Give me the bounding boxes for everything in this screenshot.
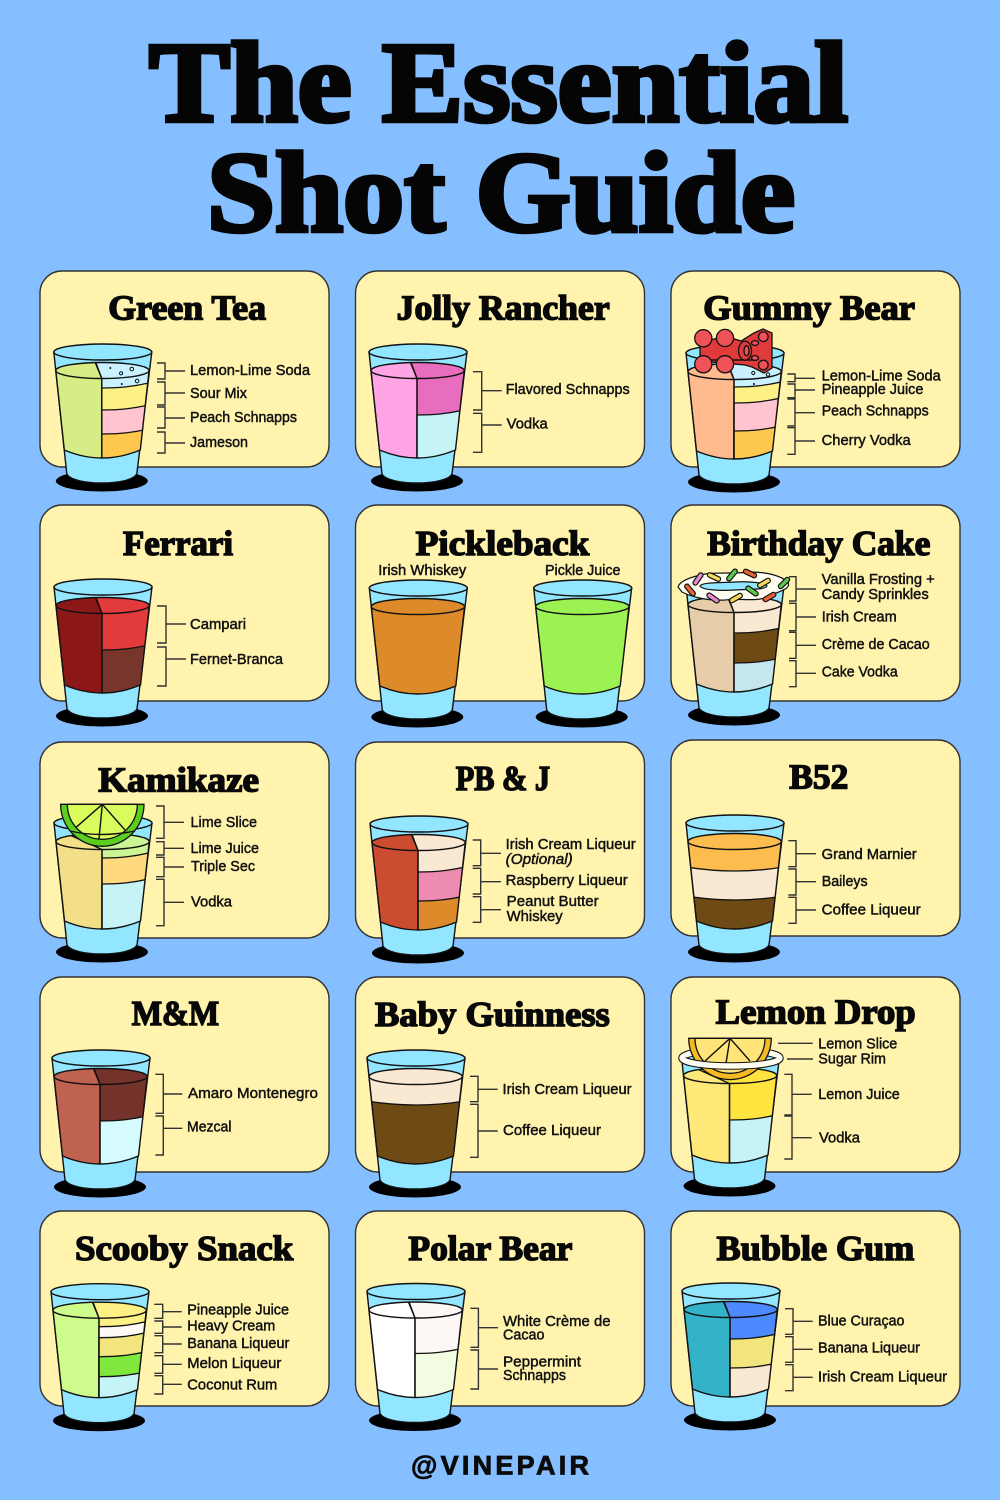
ingredient labels: Vodka bbox=[191, 895, 233, 911]
ingredient labels: Irish Cream Liqueur bbox=[506, 837, 636, 853]
ingredient labels: Whiskey bbox=[507, 909, 563, 925]
glass: Lemon Drop bbox=[681, 1056, 780, 1196]
ingredient labels: Cherry Vodka bbox=[822, 433, 912, 449]
card background bbox=[671, 271, 960, 467]
card background bbox=[356, 977, 644, 1172]
panel: Jolly Rancher bbox=[356, 271, 644, 492]
brackets bbox=[154, 1304, 182, 1394]
brackets bbox=[473, 840, 501, 922]
ingredient labels bbox=[190, 363, 311, 451]
ingredient labels bbox=[818, 1036, 900, 1147]
glass: Birthday Cake bbox=[686, 590, 784, 726]
ingredient labels: Campari bbox=[190, 617, 246, 633]
card background bbox=[356, 271, 644, 467]
heading: Bubble Gum bbox=[717, 1229, 914, 1268]
heading: Polar Bear bbox=[408, 1229, 572, 1268]
ingredient labels: Irish Cream Liqueur bbox=[502, 1082, 632, 1098]
ingredient labels bbox=[187, 1086, 318, 1136]
card background bbox=[40, 977, 329, 1172]
ingredient labels: Mezcal bbox=[187, 1120, 232, 1136]
ingredient labels bbox=[818, 1314, 947, 1386]
glass: Green Tea bbox=[53, 343, 153, 492]
ingredient labels: Lemon-Lime Soda bbox=[822, 369, 942, 385]
card background bbox=[40, 1211, 329, 1406]
ingredient labels: Crème de Cacao bbox=[822, 637, 930, 653]
ingredient labels: Candy Sprinkles bbox=[822, 587, 929, 603]
heading: B52 bbox=[789, 757, 848, 796]
ingredient labels bbox=[187, 1303, 289, 1394]
icon: lemon slice bbox=[689, 1038, 771, 1080]
glass: Pickle Juice bbox=[532, 579, 632, 728]
panel: Kamikaze bbox=[40, 742, 329, 962]
card background bbox=[40, 742, 329, 938]
ingredient labels: Coconut Rum bbox=[187, 1378, 277, 1394]
ingredient labels: Peach Schnapps bbox=[822, 404, 929, 420]
ingredient labels bbox=[506, 382, 630, 432]
brackets bbox=[787, 374, 815, 454]
title: Shot Guide bbox=[207, 129, 795, 256]
ingredient labels: Heavy Cream bbox=[187, 1319, 275, 1335]
ingredient labels bbox=[502, 1082, 632, 1139]
ingredient labels: Lemon Juice bbox=[818, 1087, 900, 1103]
brackets bbox=[156, 806, 184, 926]
panel: B52 bbox=[671, 740, 960, 962]
ingredient labels: Irish Cream Liqueur bbox=[818, 1370, 947, 1386]
ingredient labels: Vodka bbox=[507, 416, 549, 432]
heading: Green Tea bbox=[108, 288, 266, 328]
card background bbox=[40, 505, 329, 701]
brackets bbox=[788, 841, 816, 923]
ingredient labels: Raspberry Liqueur bbox=[506, 873, 628, 889]
title: The Essential bbox=[149, 19, 848, 146]
ingredient labels: Triple Sec bbox=[191, 859, 255, 875]
ingredient labels: Banana Liqueur bbox=[187, 1336, 289, 1352]
ingredient labels: Lime Slice bbox=[190, 815, 257, 831]
ingredient labels bbox=[190, 617, 284, 668]
heading: Jolly Rancher bbox=[397, 288, 610, 328]
glass: Kamikaze bbox=[53, 818, 153, 962]
glass: Baby Guinness bbox=[366, 1049, 466, 1198]
brackets bbox=[778, 1043, 813, 1159]
ingredient labels: Melon Liqueur bbox=[187, 1356, 281, 1372]
ingredient labels: Jameson bbox=[190, 435, 248, 451]
heading: M&M bbox=[132, 994, 219, 1033]
glass: B52 bbox=[685, 814, 785, 962]
card background bbox=[671, 977, 960, 1172]
ingredient labels: Pickle Juice bbox=[545, 563, 620, 579]
ingredient labels bbox=[378, 563, 620, 579]
ingredient labels: Lemon Slice bbox=[818, 1036, 897, 1052]
panel: Green Tea bbox=[40, 271, 329, 492]
card background bbox=[671, 1211, 960, 1406]
panel: M&M bbox=[40, 977, 329, 1198]
brackets bbox=[789, 577, 816, 687]
glass: Irish Whiskey bbox=[368, 579, 468, 728]
ingredient labels: Banana Liqueur bbox=[818, 1341, 920, 1357]
heading: Gummy Bear bbox=[703, 288, 915, 328]
heading: Baby Guinness bbox=[375, 995, 610, 1034]
panel: Birthday Cake bbox=[671, 505, 960, 726]
brackets bbox=[157, 363, 185, 453]
heading: Scooby Snack bbox=[75, 1229, 294, 1268]
card background bbox=[356, 505, 644, 701]
icon: sugar rim back bbox=[682, 1050, 780, 1066]
brackets bbox=[157, 606, 186, 686]
glass: Jolly Rancher bbox=[368, 343, 468, 492]
brackets bbox=[470, 1308, 498, 1389]
ingredient labels: Vodka bbox=[819, 1131, 861, 1147]
panel: Polar Bear bbox=[356, 1211, 644, 1431]
panel: Pickleback bbox=[356, 505, 644, 728]
glass: Bubble Gum bbox=[681, 1282, 781, 1430]
glass: M&M bbox=[51, 1049, 151, 1198]
heading: Kamikaze bbox=[98, 761, 259, 800]
icon: frosting and sprinkles bbox=[678, 568, 791, 604]
ingredient labels: Irish Whiskey bbox=[378, 563, 467, 579]
ingredient labels: White Crème de bbox=[503, 1314, 610, 1330]
ingredient labels: Lemon-Lime Soda bbox=[190, 363, 311, 379]
heading: PB & J bbox=[456, 759, 550, 798]
footer handle: @VINEPAIR bbox=[411, 1450, 589, 1480]
ingredient labels bbox=[822, 369, 942, 449]
brackets bbox=[785, 1309, 813, 1391]
panel: Ferrari bbox=[40, 505, 329, 726]
ingredient labels bbox=[190, 815, 259, 911]
ingredient labels bbox=[822, 847, 921, 918]
ingredient labels bbox=[503, 1314, 610, 1384]
heading: Lemon Drop bbox=[716, 992, 916, 1031]
ingredient labels: Peanut Butter bbox=[507, 894, 599, 910]
ingredient labels: (Optional) bbox=[506, 852, 573, 868]
ingredient labels: Fernet-Branca bbox=[190, 652, 284, 668]
icon: gummy bear bbox=[695, 329, 772, 373]
panel: PB & J bbox=[356, 742, 644, 964]
ingredient labels: Vanilla Frosting + bbox=[822, 572, 935, 588]
ingredient labels: Baileys bbox=[822, 874, 868, 890]
heading: Birthday Cake bbox=[707, 524, 930, 563]
card background bbox=[356, 1211, 644, 1406]
glass: Gummy Bear bbox=[685, 346, 785, 492]
ingredient labels: Sugar Rim bbox=[818, 1051, 886, 1067]
glass: PB & J bbox=[369, 815, 469, 964]
icon: sugar rim front bbox=[682, 1058, 780, 1066]
ingredient labels bbox=[506, 837, 636, 925]
heading: Ferrari bbox=[123, 524, 233, 563]
ingredient labels: Pineapple Juice bbox=[187, 1303, 289, 1319]
brackets bbox=[155, 1074, 182, 1155]
ingredient labels: Sour Mix bbox=[190, 386, 248, 402]
ingredient labels: Pineapple Juice bbox=[822, 382, 923, 398]
glass: Scooby Snack bbox=[50, 1283, 150, 1432]
heading: Pickleback bbox=[416, 524, 590, 563]
card background bbox=[356, 742, 644, 938]
ingredient labels: Amaro Montenegro bbox=[188, 1086, 318, 1102]
glass: Ferrari bbox=[53, 578, 153, 726]
panel: Baby Guinness bbox=[356, 977, 644, 1198]
panel: Lemon Drop bbox=[670, 977, 960, 1196]
ingredient labels bbox=[822, 572, 935, 681]
ingredient labels: Grand Marnier bbox=[822, 847, 917, 863]
icon: lime slice bbox=[61, 804, 144, 846]
panel: Bubble Gum bbox=[671, 1211, 960, 1430]
card background bbox=[671, 740, 960, 936]
ingredient labels: Peach Schnapps bbox=[190, 410, 297, 426]
ingredient labels: Blue Curaçao bbox=[818, 1314, 904, 1330]
card background bbox=[671, 505, 960, 701]
card background bbox=[40, 271, 329, 467]
panel: Scooby Snack bbox=[40, 1211, 329, 1431]
ingredient labels: Peppermint bbox=[503, 1354, 581, 1370]
ingredient labels: Schnapps bbox=[503, 1368, 566, 1384]
brackets bbox=[470, 1076, 498, 1157]
ingredient labels: Flavored Schnapps bbox=[506, 382, 630, 398]
ingredient labels: Coffee Liqueur bbox=[822, 902, 921, 918]
ingredient labels: Lime Juice bbox=[190, 841, 259, 857]
glass: Polar Bear bbox=[366, 1282, 466, 1431]
title bbox=[149, 19, 848, 256]
panel: Gummy Bear bbox=[671, 271, 960, 492]
ingredient labels: Cacao bbox=[503, 1328, 544, 1344]
ingredient labels: Cake Vodka bbox=[822, 665, 899, 681]
brackets bbox=[473, 372, 502, 452]
ingredient labels: Irish Cream bbox=[822, 610, 897, 626]
ingredient labels: Coffee Liqueur bbox=[503, 1123, 601, 1139]
